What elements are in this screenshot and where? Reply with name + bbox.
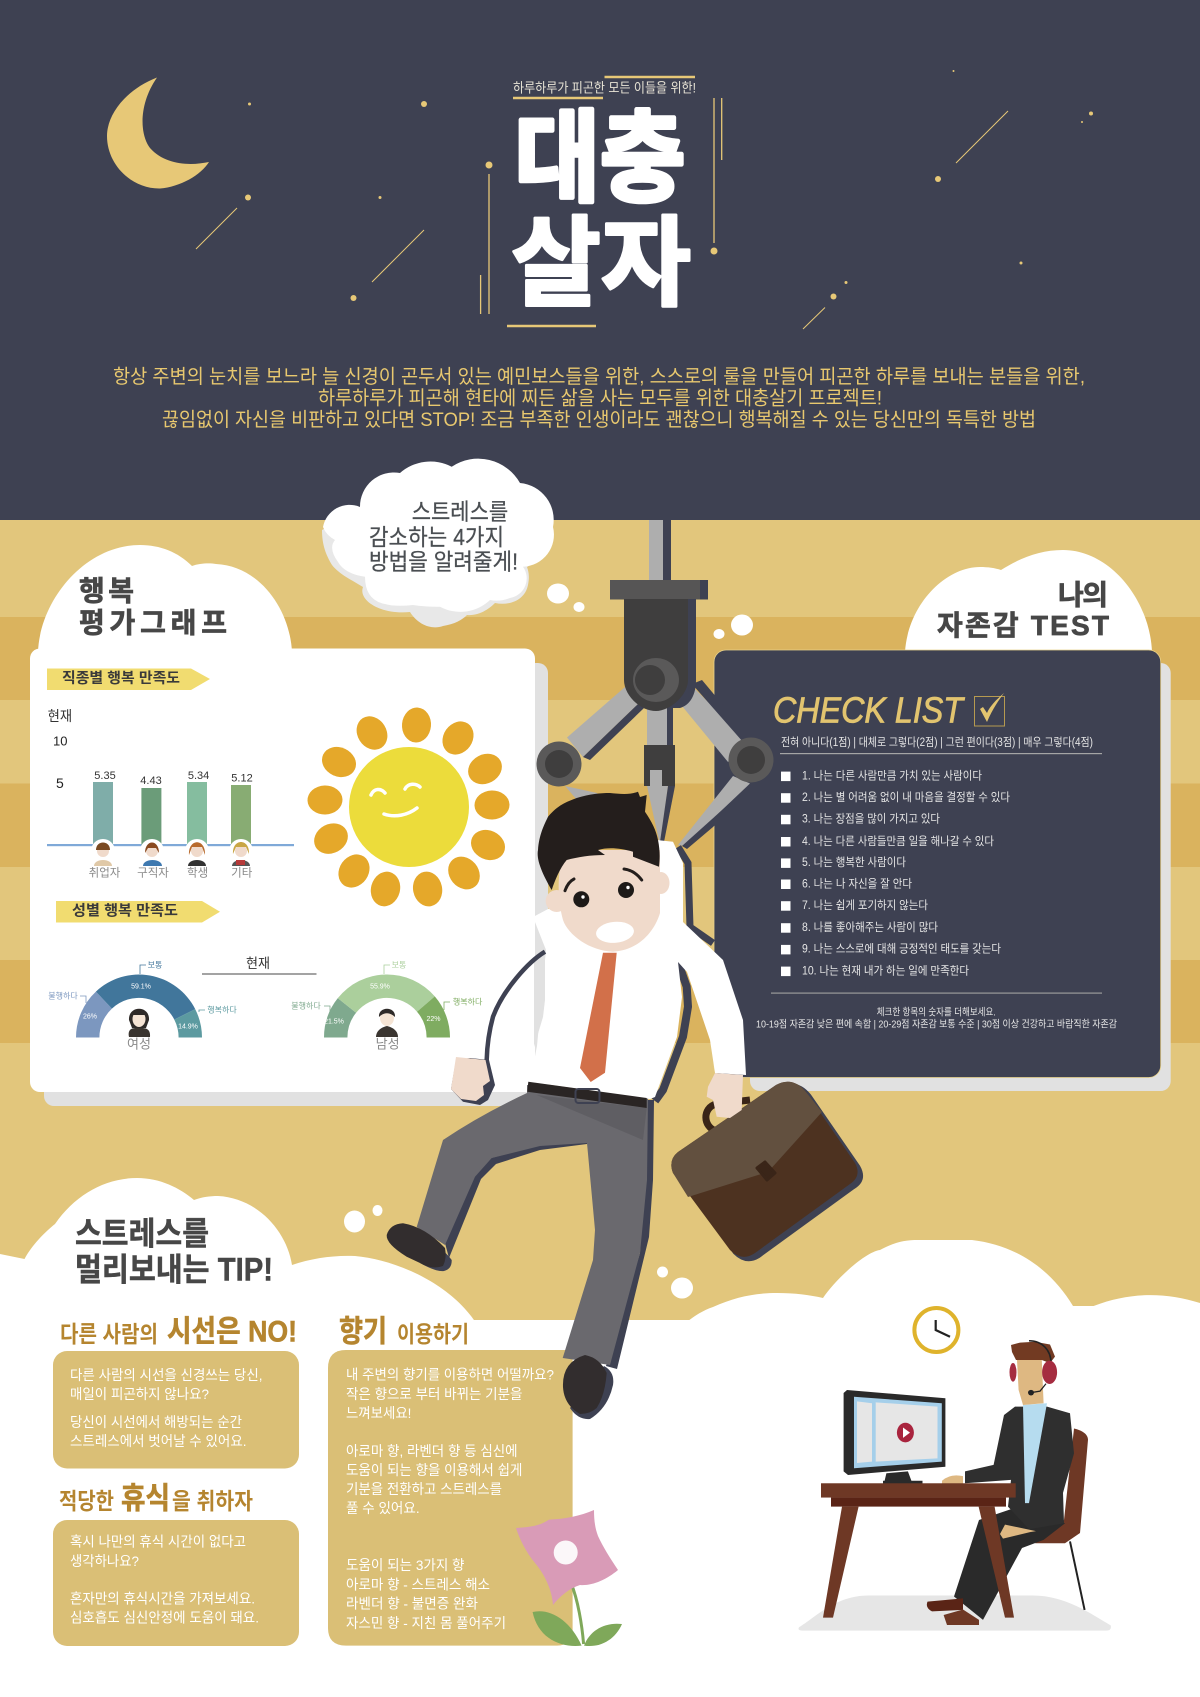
tip: scent: 느껴보세요! — [346, 1405, 411, 1421]
heading: check list: CHECK LIST — [773, 690, 966, 730]
tip: rest — [53, 1482, 299, 1646]
bar chart: job satisfaction — [47, 708, 294, 880]
tip: scent: 기분을 전환하고 스트레스를 — [346, 1481, 502, 1497]
tip: others' eyes: 다른 사람의 — [60, 1321, 158, 1347]
shoes — [387, 1223, 613, 1419]
subtitle: 하루하루가 피곤한 모든 이들을 위한! — [513, 80, 696, 96]
donut chart: women: 59.1% — [131, 984, 151, 990]
desk — [821, 1483, 1016, 1618]
panel: self-esteem checklist — [714, 550, 1171, 1091]
illustration: crane claw — [536, 520, 774, 849]
donut chart: men: 55.9% — [370, 984, 390, 990]
bar chart: job satisfaction: 기타 — [231, 866, 253, 880]
tip: scent: 라벤더 향 - 불면증 완화 — [346, 1596, 478, 1612]
label: current: 현재 — [246, 956, 270, 971]
donut chart: men: 불행하다 — [291, 1000, 321, 1010]
bottom cloud panel — [0, 1178, 1200, 1697]
heading: self-esteem test — [937, 580, 1109, 641]
check list items: 7. 나는 쉽게 포기하지 않는다 — [802, 898, 928, 912]
tip: scent: 자스민 향 - 지친 몸 풀어주기 — [346, 1615, 506, 1631]
tip: rest: 혼자만의 휴식시간을 가져보세요. — [70, 1591, 255, 1607]
bar chart: job satisfaction: 취업자 — [89, 866, 121, 880]
tip: scent: 도움이 되는 향을 이용해서 쉽게 — [346, 1462, 522, 1478]
hands — [451, 1057, 743, 1118]
stars and shooting lines — [196, 70, 1093, 329]
donut chart: women: 여성 — [127, 1036, 151, 1052]
tip: scent: 이용하기 — [397, 1321, 469, 1347]
icon: woman — [129, 1009, 150, 1037]
briefcase — [671, 1082, 862, 1260]
necktie — [580, 953, 617, 1082]
donut chart: women: 불행하다 — [48, 990, 78, 1000]
donut chart: men: 보통 — [392, 960, 406, 970]
donut chart: women: 행복하다 — [207, 1004, 237, 1014]
icon: man — [376, 1009, 398, 1037]
monitor — [844, 1390, 945, 1484]
heading: tips — [75, 1216, 273, 1288]
check list items — [781, 769, 1010, 977]
donut chart: men — [291, 960, 483, 1052]
tag: gender satisfaction: 성별 행복 만족도 — [72, 902, 178, 920]
tip: rest: 심호흡도 심신안정에 도움이 돼요. — [70, 1610, 259, 1626]
icon: job seekers avatars — [91, 839, 253, 866]
heading: self-esteem test: 자존감 TEST — [937, 610, 1109, 641]
check list items: 3. 나는 장점을 많이 가지고 있다 — [802, 813, 940, 826]
donut chart: women — [48, 960, 237, 1052]
bar chart: job satisfaction: 10 — [53, 734, 67, 748]
check list items: 9. 나는 스스로에 대해 긍정적인 태도를 갖는다 — [802, 943, 1001, 956]
bubble text: 방법을 알려줄게! — [369, 549, 518, 575]
bar chart: job satisfaction: 5.35 — [94, 770, 116, 782]
intro text: 끊임없이 자신을 비판하고 있다면 STOP! 조금 부족한 인생이라도 괜찮으니 행복해질 수 있는 당신만의 독특한 방법 — [162, 409, 1036, 431]
bar chart: job satisfaction: 4.43 — [140, 775, 162, 787]
tip: scent: 아로마 향 - 스트레스 해소 — [346, 1576, 490, 1592]
heading: happiness graph — [79, 576, 227, 638]
check list items: 5. 나는 행복한 사람이다 — [802, 856, 906, 869]
head — [538, 792, 670, 952]
tag: gender satisfaction — [56, 901, 220, 922]
jacket — [965, 1407, 1074, 1529]
tag: job satisfaction: 직종별 행복 만족도 — [62, 670, 180, 687]
tip: others' eyes: 매일이 피곤하지 않나요? — [70, 1386, 209, 1402]
header band — [0, 0, 1200, 520]
check list items: 4. 나는 다른 사람들만큼 일을 해나갈 수 있다 — [802, 834, 994, 848]
donut chart: men: 행복하다 — [453, 996, 483, 1006]
head — [1017, 1360, 1044, 1405]
tip: rest: 혹시 나만의 휴식 시간이 없다고 — [70, 1534, 246, 1550]
check list items: 2. 나는 별 어려움 없이 내 마음을 결정할 수 있다 — [802, 791, 1010, 804]
title — [511, 103, 691, 318]
scoring note — [756, 1006, 1117, 1030]
panel: happiness graph — [30, 545, 548, 1106]
tip: scent: 향기 — [339, 1316, 387, 1348]
bar chart: job satisfaction: 구직자 — [137, 866, 169, 880]
donut chart: men: 남성 — [376, 1036, 400, 1052]
check list items: 8. 나를 좋아해주는 사람이 많다 — [802, 921, 938, 934]
donut chart: men: 21.5% — [324, 1018, 344, 1026]
check list items: 6. 나는 나 자신을 잘 안다 — [802, 876, 912, 890]
icon: crescent moon — [107, 78, 209, 189]
bar chart: job satisfaction: 현재 — [48, 708, 72, 724]
tip: others' eyes: 시선은 NO! — [167, 1316, 297, 1348]
icon: wall clock — [914, 1308, 958, 1352]
donut chart: women: 14.9% — [178, 1024, 198, 1030]
bar chart: job satisfaction: 5 — [56, 775, 64, 791]
bubble text: 감소하는 4가지 — [369, 524, 504, 550]
label: current — [202, 956, 316, 975]
tip: scent: 아로마 향, 라벤더 향 등 심신에 — [346, 1443, 518, 1459]
icon: check box — [974, 693, 1004, 726]
heading: self-esteem test: 나의 — [1058, 580, 1108, 610]
legs and shoes — [954, 1507, 1065, 1620]
tag: job satisfaction — [47, 668, 210, 690]
scoring note: 10-19점 자존감 낮은 편에 속함 | 20-29점 자존감 보통 수준 | 30점 이상 건강하고 바람직한 자존감 — [756, 1018, 1117, 1030]
scoring note: 체크한 항목의 숫자를 더해보세요. — [877, 1006, 996, 1018]
intro text: 하루하루가 피곤해 현타에 찌든 삶을 사는 모두를 위한 대충살기 프로젝트! — [318, 388, 882, 410]
donut chart: men: 22% — [426, 1016, 441, 1023]
tip: others' eyes: 스트레스에서 벗어날 수 있어요. — [70, 1433, 246, 1449]
tip: rest: 적당한 — [59, 1488, 114, 1514]
donut chart: women: 26% — [83, 1014, 97, 1020]
tip: scent: 작은 향으로 부터 바뀌는 기분을 — [346, 1386, 523, 1402]
icon: flower — [516, 1510, 622, 1646]
tip: rest: 생각하나요? — [70, 1553, 139, 1569]
tip: scent — [328, 1316, 573, 1646]
bar chart: job satisfaction: 5.34 — [188, 770, 209, 782]
bar chart: job satisfaction: 학생 — [187, 866, 208, 880]
illustration: tired salaryman — [387, 792, 862, 1419]
tip: rest: 을 취하자 — [172, 1488, 253, 1514]
chair — [1070, 1541, 1085, 1610]
tip: rest: 휴식 — [121, 1482, 170, 1516]
check list items: 10. 나는 현재 내가 하는 일에 만족한다 — [802, 963, 969, 977]
heading: happiness graph: 행복 — [79, 576, 134, 606]
intro text: 항상 주변의 눈치를 보느라 늘 신경이 곤두서 있는 예민보스들을 위한, 스스로의 룰을 만들어 피곤한 하루를 보내는 분들을 위한, — [113, 366, 1085, 388]
heading: happiness graph: 평가그래프 — [79, 608, 227, 638]
heading: tips: 스트레스를 — [75, 1216, 209, 1252]
bubble text: 스트레스를 — [412, 499, 508, 525]
tip: others' eyes: 다른 사람의 시선을 신경쓰는 당신, — [70, 1367, 262, 1383]
tip: scent: 풀 수 있어요. — [346, 1500, 420, 1516]
illustration: office worker at desk — [798, 1341, 1111, 1631]
tip: others' eyes — [53, 1316, 299, 1468]
tip: others' eyes: 당신이 시선에서 해방되는 순간 — [70, 1414, 242, 1430]
bubble text — [369, 499, 518, 575]
scale legend: 전혀 아니다(1점) | 대체로 그렇다(2점) | 그런 편이다(3점) | 매우 그렇다(4점) — [781, 735, 1093, 749]
bar chart: job satisfaction: 5.12 — [231, 772, 253, 784]
check list items: 1. 나는 다른 사람만큼 가치 있는 사람이다 — [802, 769, 982, 782]
thought bubble — [322, 459, 554, 627]
tip: scent: 내 주변의 향기를 이용하면 어떨까요? — [346, 1367, 554, 1383]
heading: tips: 멀리보내는 TIP! — [75, 1252, 273, 1288]
intro text — [113, 366, 1085, 431]
belt — [527, 1082, 647, 1108]
donut chart: women: 보통 — [148, 960, 162, 970]
trousers — [417, 1085, 654, 1369]
icon: smiling sun — [307, 706, 510, 910]
title: 대충 — [514, 103, 686, 215]
tip: scent: 도움이 되는 3가지 향 — [346, 1557, 465, 1573]
shirt — [487, 840, 746, 1101]
title: 살자 — [511, 208, 691, 318]
